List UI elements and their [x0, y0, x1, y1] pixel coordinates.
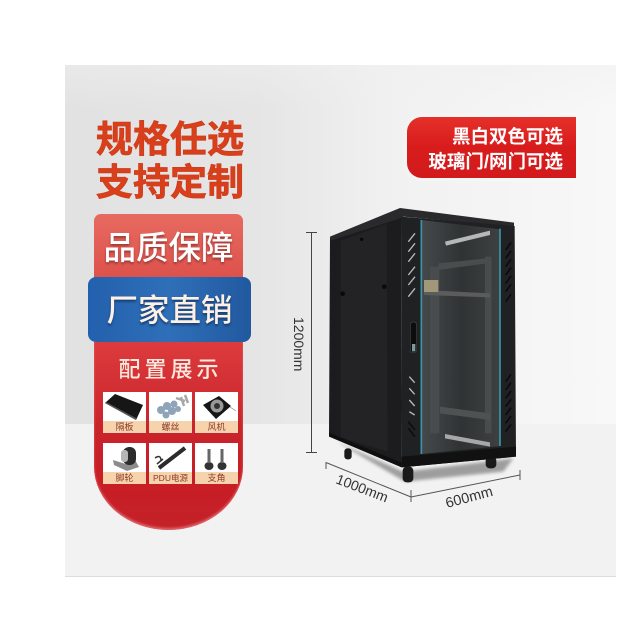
side panel: [329, 209, 402, 467]
dimension: height: [306, 232, 317, 453]
title: 规格任选: [96, 119, 244, 160]
dimension: depth: [326, 462, 411, 502]
blue panel: factory direct: 厂家直销: [106, 292, 232, 328]
heading: configuration: 配置展示: [118, 357, 222, 382]
rack interior: [430, 257, 492, 433]
item: screws: 螺丝: [161, 422, 180, 432]
red panel: quality assurance: 品质保障: [103, 230, 234, 266]
blue panel: factory direct: [88, 277, 251, 342]
red shield: configuration display: [94, 342, 243, 530]
glass door: [422, 220, 501, 454]
front frame: [401, 217, 516, 467]
item: PDU power strip: PDU电源: [153, 473, 188, 483]
background wall and floor: [65, 65, 616, 577]
item: fan: [195, 392, 238, 433]
label: 1200mm: 1200mm: [291, 317, 307, 371]
label: 1000mm: 1000mm: [334, 471, 391, 505]
vent slots: [408, 233, 511, 437]
floor shadow: [337, 442, 513, 482]
teal door edges: [421, 220, 500, 454]
title: 支持定制: [96, 162, 244, 203]
label: 600mm: 600mm: [444, 484, 495, 512]
cabinet: [329, 208, 516, 482]
item: screws: [149, 392, 192, 433]
top face: [330, 208, 514, 241]
red panel: quality assurance: [94, 214, 243, 282]
item: partition board: 隔板: [115, 422, 134, 432]
item: feet: [195, 443, 238, 484]
item: caster: 脚轮: [115, 473, 134, 483]
badge: colour and door options: 黑白双色可选: [452, 126, 563, 147]
badge: colour and door options: 玻璃门/网门可选: [428, 151, 563, 172]
title: [96, 119, 244, 203]
badge: colour and door options: [407, 117, 576, 178]
item: feet: 支角: [207, 473, 226, 483]
item: partition board: [103, 392, 146, 433]
wheels: [344, 448, 496, 482]
item: PDU power strip: [149, 443, 192, 484]
dimension: width: [411, 470, 520, 497]
item: fan: 风机: [207, 422, 226, 432]
item: caster: [103, 443, 146, 484]
door handle: [410, 322, 417, 353]
